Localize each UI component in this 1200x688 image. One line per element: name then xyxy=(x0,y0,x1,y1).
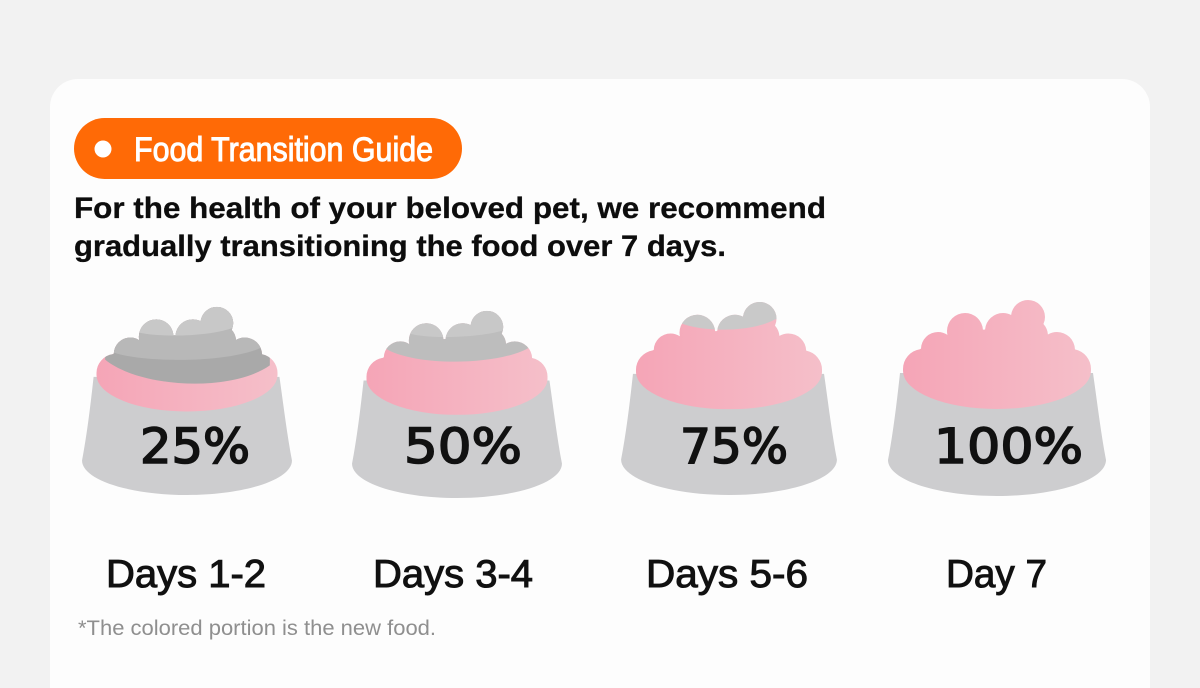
intro text: gradually transitioning the food over 7 days. xyxy=(74,230,726,263)
label: Days 3-4: Days 3-4 xyxy=(373,553,533,596)
bowl: 50% xyxy=(352,307,562,498)
bowl: 75% xyxy=(621,298,837,495)
label: Days 1-2: Days 1-2 xyxy=(106,553,266,596)
intro text: For the health of your beloved pet, we recommend xyxy=(74,192,826,225)
label: Day 7: Day 7 xyxy=(946,553,1047,596)
bowl: 25% xyxy=(82,303,292,495)
percentage: 75%: 75% xyxy=(680,419,788,475)
label: Days 5-6: Days 5-6 xyxy=(646,553,808,596)
intro text xyxy=(74,192,826,263)
badge: Food Transition Guide: Food Transition Guide xyxy=(134,131,433,169)
percentage: 100%: 100% xyxy=(934,419,1083,475)
percentage: 25%: 25% xyxy=(140,419,250,475)
badge: Food Transition Guide xyxy=(74,118,462,179)
bowl: 100% xyxy=(888,296,1106,496)
footnote: *The colored portion is the new food. xyxy=(78,617,436,640)
percentage: 50%: 50% xyxy=(404,419,522,475)
